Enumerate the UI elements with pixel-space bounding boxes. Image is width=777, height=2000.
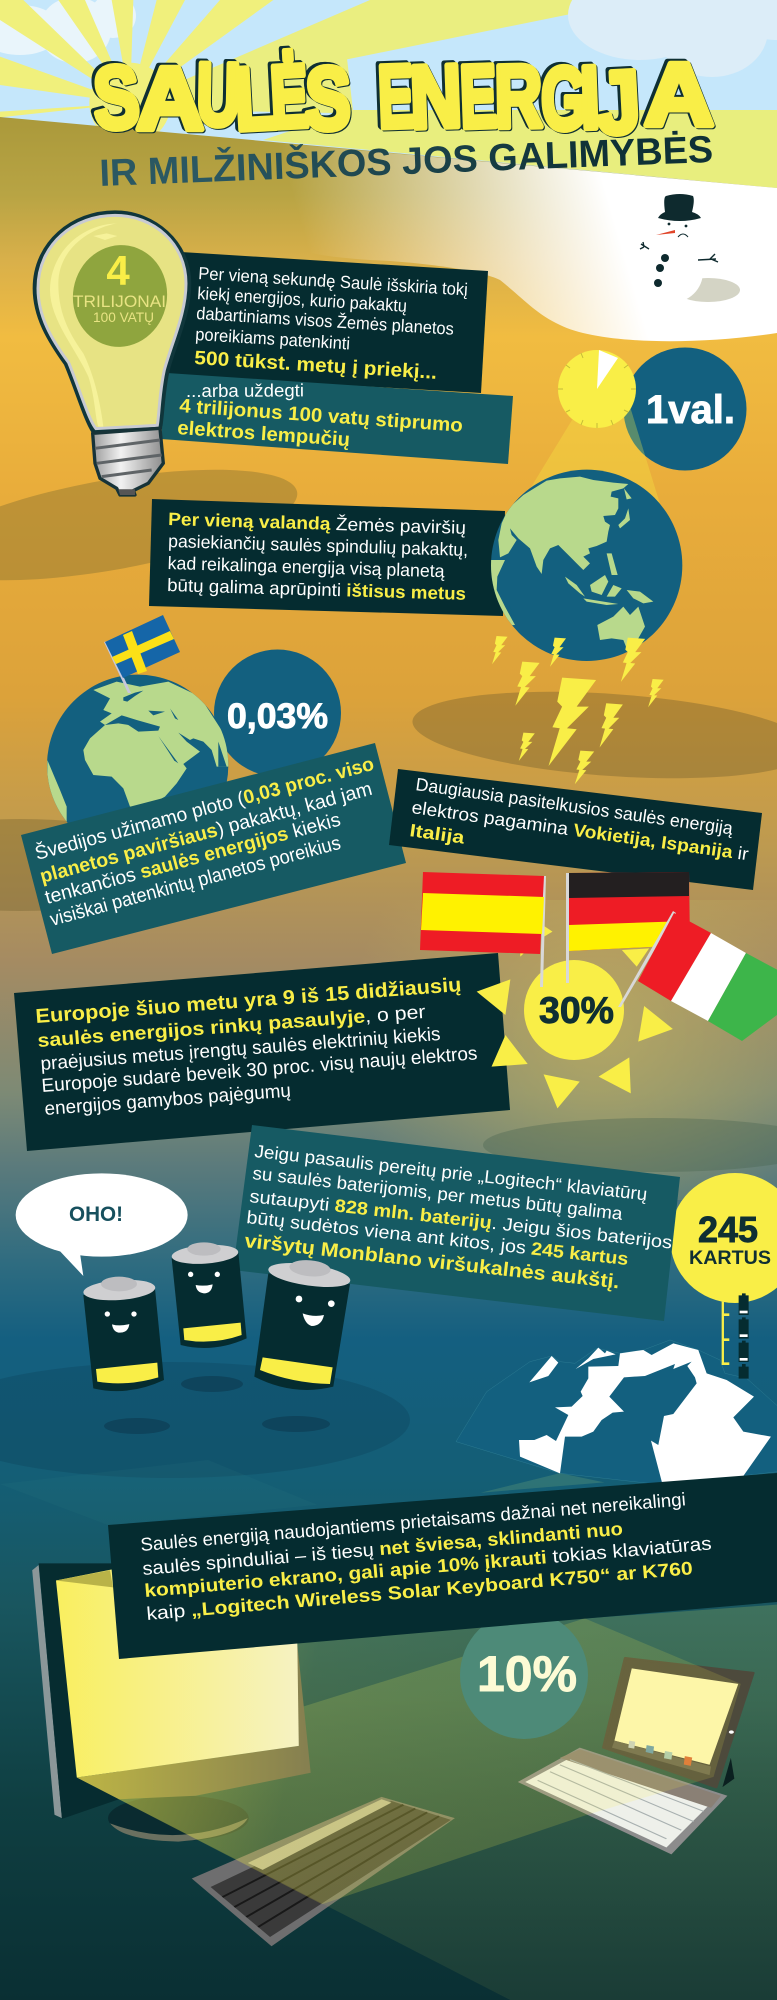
panel: Logitech batteries <box>233 1125 680 1321</box>
panel: one second: dabartiniams visos Žemės planetos <box>196 303 455 339</box>
chart: one hour circle <box>624 348 746 470</box>
speech bubble: OHO! <box>69 1203 123 1226</box>
panel: Logitech batteries: viršytų Monblano viršukalnės aukštį. <box>243 1230 621 1293</box>
icon: Spanish flag <box>420 872 546 987</box>
panel: Logitech batteries: būtų sudėtos viena ant kitos, jos 245 kartus <box>246 1207 629 1269</box>
panel: one second: kiekį energijos, kurio pakaktų <box>197 283 408 316</box>
bulb numbers <box>73 247 166 325</box>
panel: Sweden: planetos paviršiaus) pakaktų, kad jam <box>38 778 375 888</box>
panel: one second: Per vieną sekundę Saulė išskiria tokį <box>198 263 469 299</box>
title: J <box>594 51 643 153</box>
panel: one second: poreikiams patenkinti <box>195 324 351 353</box>
panel: Sweden <box>21 743 406 954</box>
bulb numbers: 100 VATŲ <box>93 310 154 325</box>
title: A <box>136 48 204 148</box>
light beam from clock to Earth <box>505 400 668 530</box>
tablet screen <box>612 1668 738 1775</box>
panel: Europe: Europoje šiuo metu yra 9 iš 15 didžiausių <box>35 974 462 1028</box>
tablet <box>604 1658 753 1787</box>
panel: four trillion bulbs: 4 trilijonus 100 vatų stiprumo <box>179 395 464 437</box>
batteries <box>83 1242 352 1434</box>
title: E <box>458 45 499 147</box>
title: E <box>376 45 416 147</box>
panel: one hour: pasiekiančių saulės spindulių pakaktų, <box>168 531 468 560</box>
icon: Swedish flag <box>104 615 180 693</box>
panel: one second: 500 tūkst. metų į priekį... <box>194 347 438 384</box>
title: L <box>232 47 279 149</box>
panel: one second <box>166 252 488 393</box>
panel: Sweden: Švedijos užimamo ploto (0,03 proc. viso <box>32 752 376 865</box>
title: S <box>91 46 142 148</box>
panel: Europe: Europoje sudarė beveik 30 proc. visų naujų elektros <box>41 1043 478 1097</box>
icon: Earth showing Asia <box>487 470 682 661</box>
monitor <box>32 1563 311 1819</box>
monitor stand <box>108 1795 249 1842</box>
panel: four trillion bulbs: elektros lempučių <box>177 417 351 451</box>
chart: 245 times balloon: 245 <box>698 1209 758 1250</box>
title: S <box>305 48 351 148</box>
panel: four trillion bulbs <box>161 373 513 464</box>
icon: Earth showing Europe and Africa <box>47 674 228 823</box>
panel: solar keyboards: kompiuterio ekrano, gali apie 10% įkrauti tokias klaviatūras <box>144 1532 712 1601</box>
title: I <box>578 47 602 147</box>
icon: mountain Mont Blanc <box>456 1340 777 1485</box>
icon: snowman <box>639 194 740 303</box>
speech bubble <box>16 1173 188 1276</box>
panel: Europe: energijos gamybos pajėgumų <box>44 1081 292 1120</box>
icon: clock <box>558 350 636 428</box>
subtitle: IR MILŽINIŠKOS JOS GALIMYBĖS <box>99 126 714 195</box>
title: N <box>408 45 464 147</box>
title: U <box>196 44 241 144</box>
icon: light bulb <box>36 213 188 495</box>
chart: 30% sun <box>477 925 673 1108</box>
panel: leading countries: elektros pagamina Vokietija, Ispanija ir <box>410 797 750 864</box>
icon: German flag <box>566 872 690 983</box>
battery right <box>254 1259 352 1390</box>
panel: leading countries: Daugiausia pasitelkusios saulės energiją <box>414 774 735 839</box>
title: A <box>644 44 714 144</box>
title: R <box>494 46 543 146</box>
chart: 10% circle <box>460 1611 588 1739</box>
bright light beam <box>77 1618 741 1904</box>
panel: solar keyboards <box>108 1473 777 1659</box>
title: G <box>541 48 587 148</box>
panel: one hour: būtų galima aprūpinti ištisus metus <box>167 575 466 604</box>
bulb numbers: TRILIJONAI <box>73 292 166 311</box>
panel: Logitech batteries: sutaupyti 828 mln. baterijų . Jeigu šios baterijos <box>249 1186 673 1253</box>
panel: four trillion bulbs: ...arba uždegti <box>186 380 304 401</box>
icon: lightning bolts <box>492 636 664 784</box>
panel: Logitech batteries: su saulės baterijomis, per metus būtų galima <box>252 1163 625 1224</box>
panel: Sweden: visiškai patenkintų planetos poreikius <box>48 832 343 931</box>
keyboard right <box>518 1748 727 1854</box>
chart: 245 times balloon <box>670 1173 777 1303</box>
ground shadows <box>0 448 777 1478</box>
panel: solar keyboards: kaip „Logitech Wireless Solar Keyboard K750“ ar K760 <box>146 1557 693 1624</box>
bulb numbers: 4 <box>106 247 130 294</box>
title: Ė <box>268 45 311 147</box>
chart: 10% circle: 10% <box>477 1646 577 1702</box>
panel: Europe: saulės energijos rinkų pasaulyje , o per <box>37 1002 427 1052</box>
chart: 0,03% circle <box>214 650 341 776</box>
battery middle <box>171 1242 247 1348</box>
panel: one hour: Per vieną valandą Žemės paviršių <box>168 509 466 538</box>
soft floor light <box>77 1605 777 2000</box>
chart: 245 times balloon: KARTUS <box>689 1247 771 1269</box>
chart: 0,03% circle: 0,03% <box>227 697 328 736</box>
label: 1 val.: 1val. <box>646 388 735 432</box>
icon: monitor and keyboards in the light beam <box>0 1460 777 2000</box>
battery left <box>83 1277 164 1391</box>
keyboard left <box>192 1797 455 1946</box>
chart: 30% sun: 30% <box>539 990 614 1031</box>
icon: battery stack with height ruler <box>722 1293 749 1379</box>
panel: Sweden: tenkančios saulės energijos kiekis <box>43 809 343 909</box>
panel: Logitech batteries: Jeigu pasaulis pereitų prie „Logitech“ klaviatūrų <box>254 1141 648 1204</box>
panel: one hour <box>149 499 505 616</box>
title <box>91 44 714 153</box>
panel: Europe <box>14 953 510 1151</box>
panel: Europe: praėjusius metus įrengtų saulės elektrinių kiekis <box>40 1024 441 1075</box>
icon: Italian flag <box>618 911 777 1041</box>
panel: leading countries <box>389 769 762 890</box>
panel: solar keyboards: saulės spinduliai – iš tiesų net šviesa, sklindanti nuo <box>142 1518 624 1579</box>
panel: solar keyboards: Saulės energiją naudojantiems prietaisams dažnai net nereikalingi <box>140 1488 686 1555</box>
panel: leading countries: Italija <box>408 820 467 848</box>
panel: one hour: kad reikalinga energija visą planetą <box>167 553 446 581</box>
